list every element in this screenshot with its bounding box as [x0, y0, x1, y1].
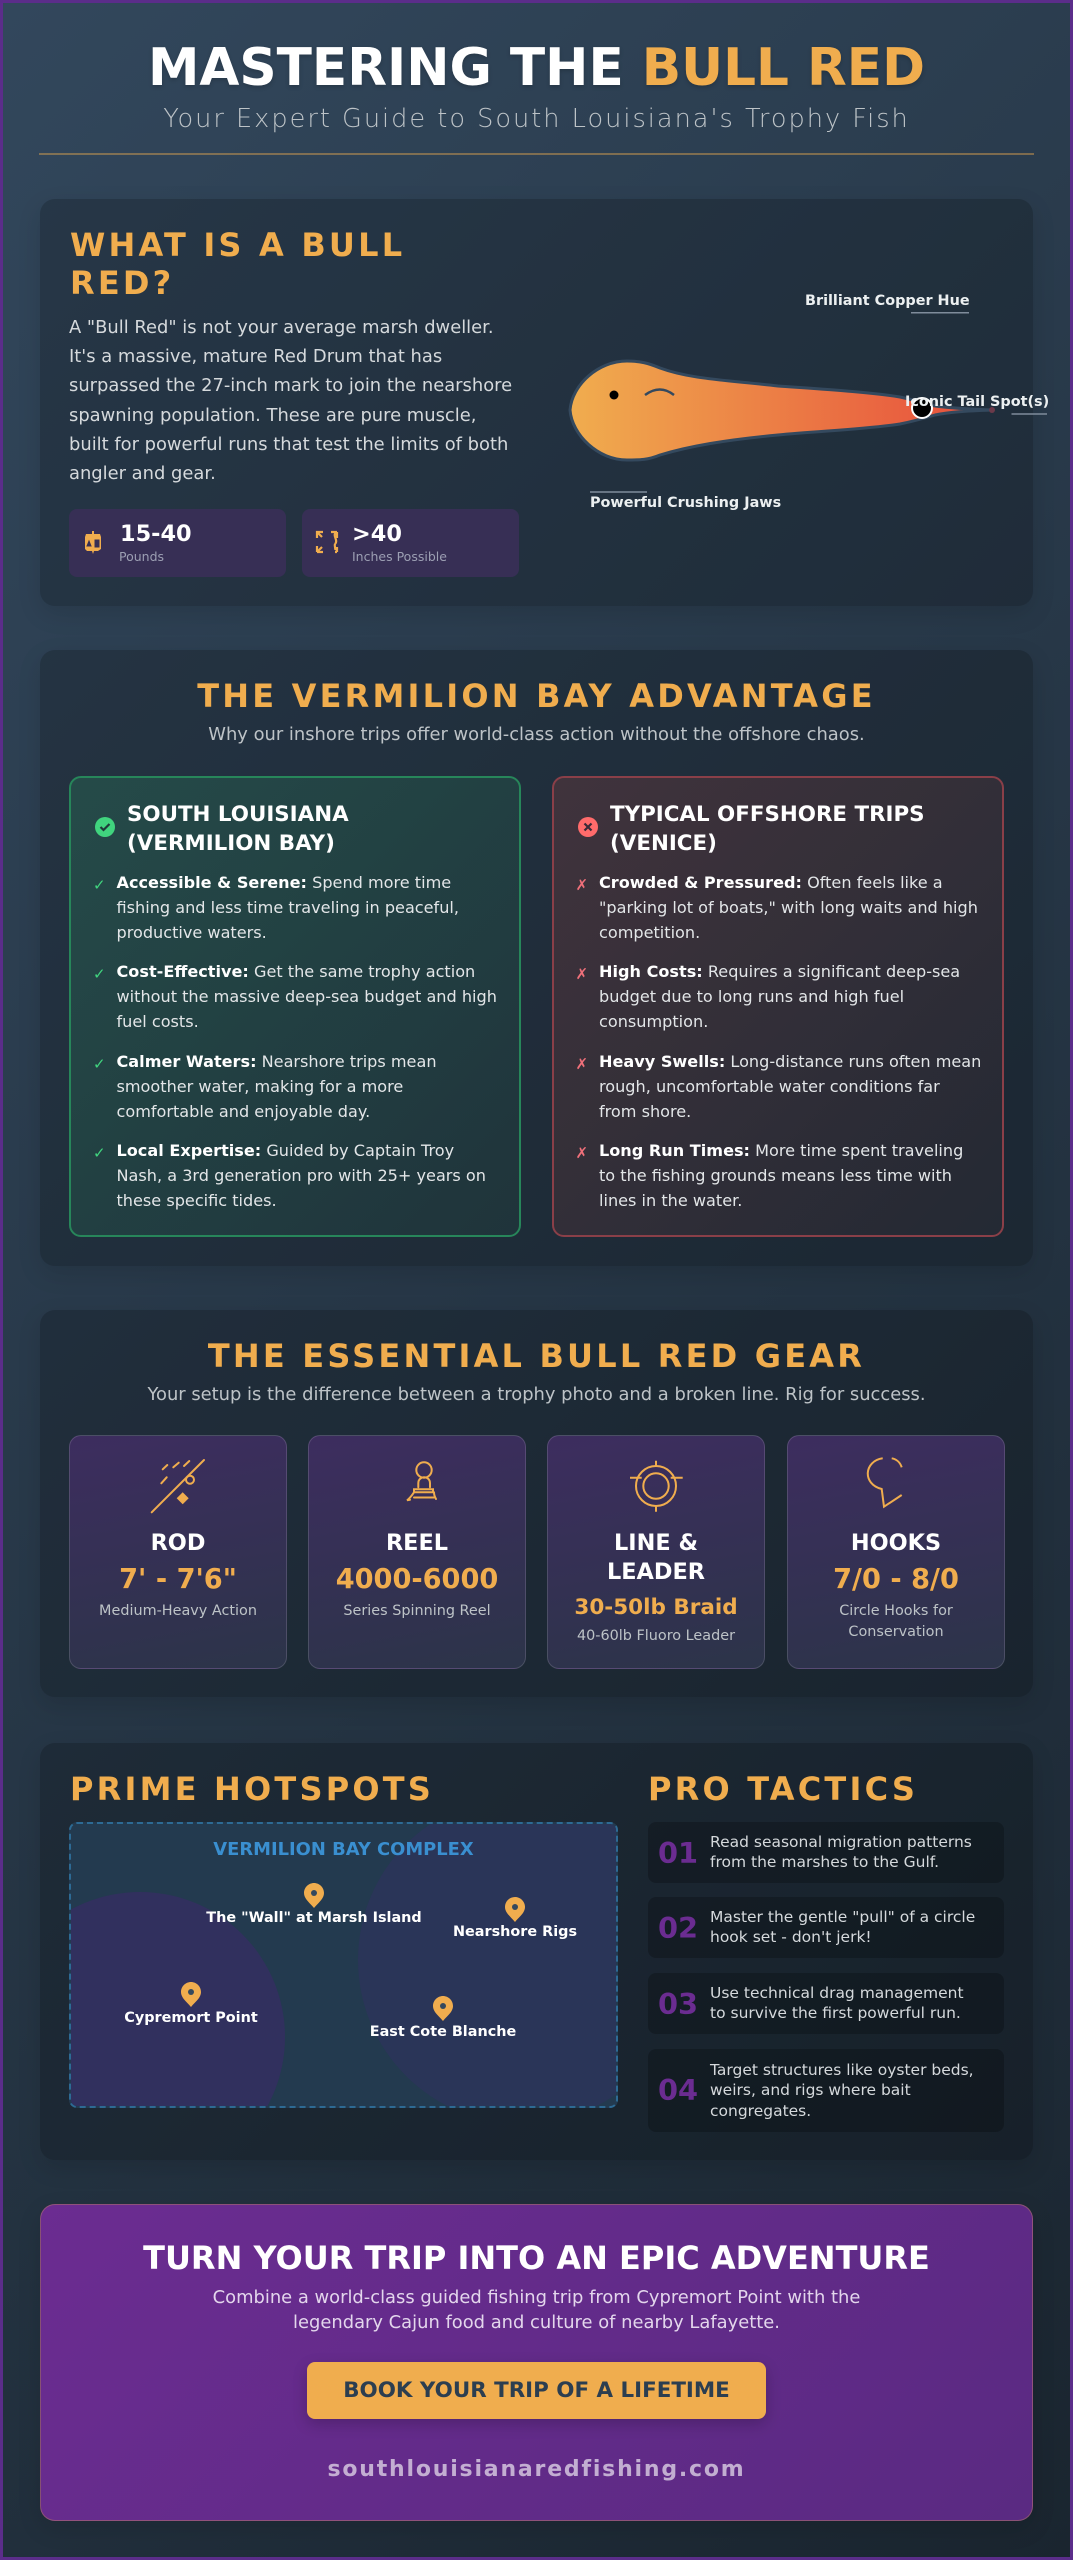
panel: south louisiana: ✓ — [93, 965, 106, 983]
tactic 04: 04 — [658, 2073, 698, 2107]
item: budget due to long runs and high fuel — [599, 987, 904, 1006]
item: Crowded & Pressured: Often feels like a — [599, 873, 943, 892]
text block: description: A "Bull Red" is not your average marsh dweller. — [69, 317, 494, 338]
icon: hook — [866, 1457, 903, 1508]
callout: copper hue: Brilliant Copper Hue — [805, 293, 970, 309]
item — [93, 1052, 437, 1121]
pin: the wall: The "Wall" at Marsh Island — [206, 1910, 422, 1926]
panel: south louisiana: ✓ — [93, 876, 106, 894]
callout leader lines — [590, 313, 1047, 492]
tactic 04 — [648, 2049, 1004, 2132]
text block: description: built for powerful runs that test the limits of both — [69, 434, 508, 455]
panel: south louisiana: ✓ — [93, 1055, 106, 1073]
note: 40-60lb Fluoro Leader — [577, 1628, 735, 1644]
column heading — [127, 802, 349, 856]
panel: south louisiana — [69, 776, 521, 1237]
card: reel — [308, 1435, 526, 1669]
item: from shore. — [599, 1102, 691, 1121]
item: productive waters. — [116, 923, 267, 942]
label: LINE & — [614, 1530, 698, 1556]
tactic 02 — [648, 1897, 1004, 1958]
heading: WHAT IS A BULL — [70, 226, 405, 264]
item: to the fishing grounds means less time with — [599, 1166, 952, 1185]
item: rough, uncomfortable water conditions far — [599, 1077, 940, 1096]
panel: what is a bull red — [40, 199, 1033, 606]
subheading: Your setup is the difference between a trophy photo and a broken line. Rig for success. — [147, 1384, 926, 1405]
column heading: TYPICAL OFFSHORE TRIPS — [610, 802, 925, 826]
text block: description: angler and gear. — [69, 463, 216, 484]
item: Accessible & Serene: Spend more time — [116, 873, 451, 892]
pin: cypremort point — [124, 1982, 258, 2026]
item: Calmer Waters: Nearshore trips mean — [116, 1052, 437, 1071]
icon: expand arrows — [316, 530, 338, 554]
card: line and leader — [547, 1435, 765, 1669]
icon: reel — [406, 1461, 437, 1502]
item: fuel costs. — [116, 1012, 199, 1031]
stat: inches: Inches Possible — [352, 549, 447, 564]
heading — [70, 226, 405, 302]
item: these specific tides. — [116, 1191, 277, 1210]
subheading: Why our inshore trips offer world-class action without the offshore chaos. — [208, 724, 865, 745]
tactic 02: Master the gentle "pull" of a circle — [710, 1908, 975, 1926]
item: "parking lot of boats," with long waits and high — [599, 898, 978, 917]
item — [576, 1052, 981, 1121]
icon: rod — [150, 1459, 205, 1514]
note: Series Spinning Reel — [343, 1603, 491, 1619]
card: hooks — [787, 1435, 1005, 1669]
header — [148, 38, 925, 134]
tactic 04: Target structures like oyster beds, — [710, 2061, 974, 2079]
tail spot — [912, 398, 932, 418]
stat: inches — [302, 509, 519, 577]
text block: description: surpassed the 27-inch mark to join the nearshore — [69, 375, 512, 396]
value: 7' - 7'6" — [119, 1564, 237, 1595]
heading: tactics: PRO TACTICS — [648, 1770, 918, 1808]
panel: south louisiana: ✓ — [93, 1144, 106, 1162]
button: BOOK YOUR TRIP OF A LIFETIME — [343, 2378, 730, 2403]
item — [93, 1141, 486, 1210]
tactic 01: 01 — [658, 1836, 698, 1870]
tactic 04: congregates. — [710, 2102, 811, 2120]
tactic 01: from the marshes to the Gulf. — [710, 1853, 939, 1871]
column heading — [610, 802, 925, 856]
pin: nearshore rigs — [453, 1897, 577, 1940]
label: REEL — [386, 1530, 448, 1556]
note: Conservation — [848, 1624, 944, 1640]
title: MASTERING THE BULL RED — [148, 38, 925, 98]
item: competition. — [599, 923, 700, 942]
panel: offshore trips — [552, 776, 1004, 1237]
item — [93, 873, 459, 942]
column heading: (VERMILION BAY) — [127, 830, 335, 856]
map title: VERMILION BAY COMPLEX — [213, 1839, 474, 1860]
note: Circle Hooks for — [839, 1603, 953, 1619]
tactic 03: Use technical drag management — [710, 1984, 964, 2002]
note — [839, 1603, 953, 1640]
callout: tail spot: Iconic Tail Spot(s) — [905, 394, 1049, 410]
tactic 04: weirs, and rigs where bait — [710, 2081, 911, 2099]
panel: call to action — [40, 2204, 1033, 2521]
tactic 03: 03 — [658, 1987, 698, 2021]
item: High Costs: Requires a significant deep-sea — [599, 962, 960, 981]
panel: offshore trips: ✗ — [576, 1055, 588, 1073]
icon: line spool — [630, 1460, 683, 1512]
label: ROD — [151, 1530, 205, 1556]
stat: inches: >40 — [352, 521, 402, 547]
item: Nash, a 3rd generation pro with 25+ years on — [116, 1166, 486, 1185]
item: Long Run Times: More time spent traveling — [599, 1141, 963, 1160]
fish mouth — [645, 390, 674, 395]
item — [576, 962, 960, 1031]
label line 2: LEADER — [607, 1559, 705, 1585]
tactic 03 — [648, 1973, 1004, 2034]
website: southlouisianaredfishing.com — [327, 2457, 746, 2482]
tactic 02: 02 — [658, 1911, 698, 1945]
note: Medium-Heavy Action — [99, 1603, 257, 1619]
item: lines in the water. — [599, 1191, 742, 1210]
column heading: (VENICE) — [610, 830, 717, 856]
cta text — [213, 2287, 860, 2333]
cta text: Combine a world-class guided fishing trip from Cypremort Point with the — [213, 2287, 860, 2308]
card: rod — [69, 1435, 287, 1669]
item: consumption. — [599, 1012, 708, 1031]
stat: pounds: Pounds — [119, 549, 164, 564]
fish eye — [610, 390, 618, 400]
item: without the massive deep-sea budget and high — [116, 987, 497, 1006]
small tail spot — [989, 407, 995, 413]
panel: offshore trips: ✗ — [576, 1144, 588, 1162]
panel: vermilion bay advantage — [40, 650, 1033, 1266]
pin: cypremort point: Cypremort Point — [124, 2010, 258, 2026]
column heading: SOUTH LOUISIANA — [127, 802, 349, 826]
item: smoother water, making for a more — [116, 1077, 403, 1096]
heading: hotspots: PRIME HOTSPOTS — [70, 1770, 434, 1808]
map — [69, 1822, 618, 2108]
stat: pounds: 15-40 — [120, 521, 192, 547]
text block: description: It's a massive, mature Red Drum that has — [69, 346, 442, 367]
value: 4000-6000 — [336, 1564, 498, 1595]
icon: cross — [578, 817, 598, 837]
tactic 01 — [648, 1822, 1004, 1883]
callout: jaws: Powerful Crushing Jaws — [590, 495, 781, 511]
item — [576, 873, 978, 942]
item: comfortable and enjoyable day. — [116, 1102, 370, 1121]
value: 7/0 - 8/0 — [833, 1564, 959, 1595]
tactic 03: to survive the first powerful run. — [710, 2004, 961, 2022]
item: Cost-Effective: Get the same trophy action — [116, 962, 475, 981]
pin: the wall — [206, 1883, 422, 1926]
panel: essential gear — [40, 1310, 1033, 1697]
text block: description: spawning population. These are pure muscle, — [69, 405, 476, 426]
text block: description — [69, 317, 512, 484]
pin: east cote blanche: East Cote Blanche — [370, 2024, 516, 2040]
cta text: legendary Cajun food and culture of nearby Lafayette. — [293, 2312, 780, 2333]
fish body — [570, 361, 992, 460]
stat: pounds — [69, 509, 286, 577]
tactic 02: hook set - don't jerk! — [710, 1928, 872, 1946]
item: Heavy Swells: Long-distance runs often mean — [599, 1052, 981, 1071]
pin: nearshore rigs: Nearshore Rigs — [453, 1924, 577, 1940]
tactic 01: Read seasonal migration patterns — [710, 1833, 972, 1851]
item — [93, 962, 497, 1031]
heading: RED? — [70, 264, 174, 302]
fish diagram — [568, 312, 1047, 493]
panel: offshore trips: ✗ — [576, 965, 588, 983]
item: fishing and less time traveling in peaceful, — [116, 898, 459, 917]
panel: hotspots and tactics — [40, 1743, 1033, 2160]
value: 30-50lb Braid — [574, 1595, 738, 1620]
pin: east cote blanche — [370, 1996, 516, 2040]
heading: THE ESSENTIAL BULL RED GEAR — [208, 1337, 865, 1375]
heading: THE VERMILION BAY ADVANTAGE — [197, 677, 876, 715]
icon: weight — [85, 531, 101, 554]
button — [307, 2362, 766, 2419]
subtitle: Your Expert Guide to South Louisiana's Trophy Fish — [163, 104, 910, 134]
item: Local Expertise: Guided by Captain Troy — [116, 1141, 454, 1160]
label: HOOKS — [851, 1530, 941, 1556]
panel: offshore trips: ✗ — [576, 876, 588, 894]
icon: check — [95, 817, 115, 837]
item — [576, 1141, 963, 1210]
cta heading: TURN YOUR TRIP INTO AN EPIC ADVENTURE — [143, 2239, 930, 2277]
